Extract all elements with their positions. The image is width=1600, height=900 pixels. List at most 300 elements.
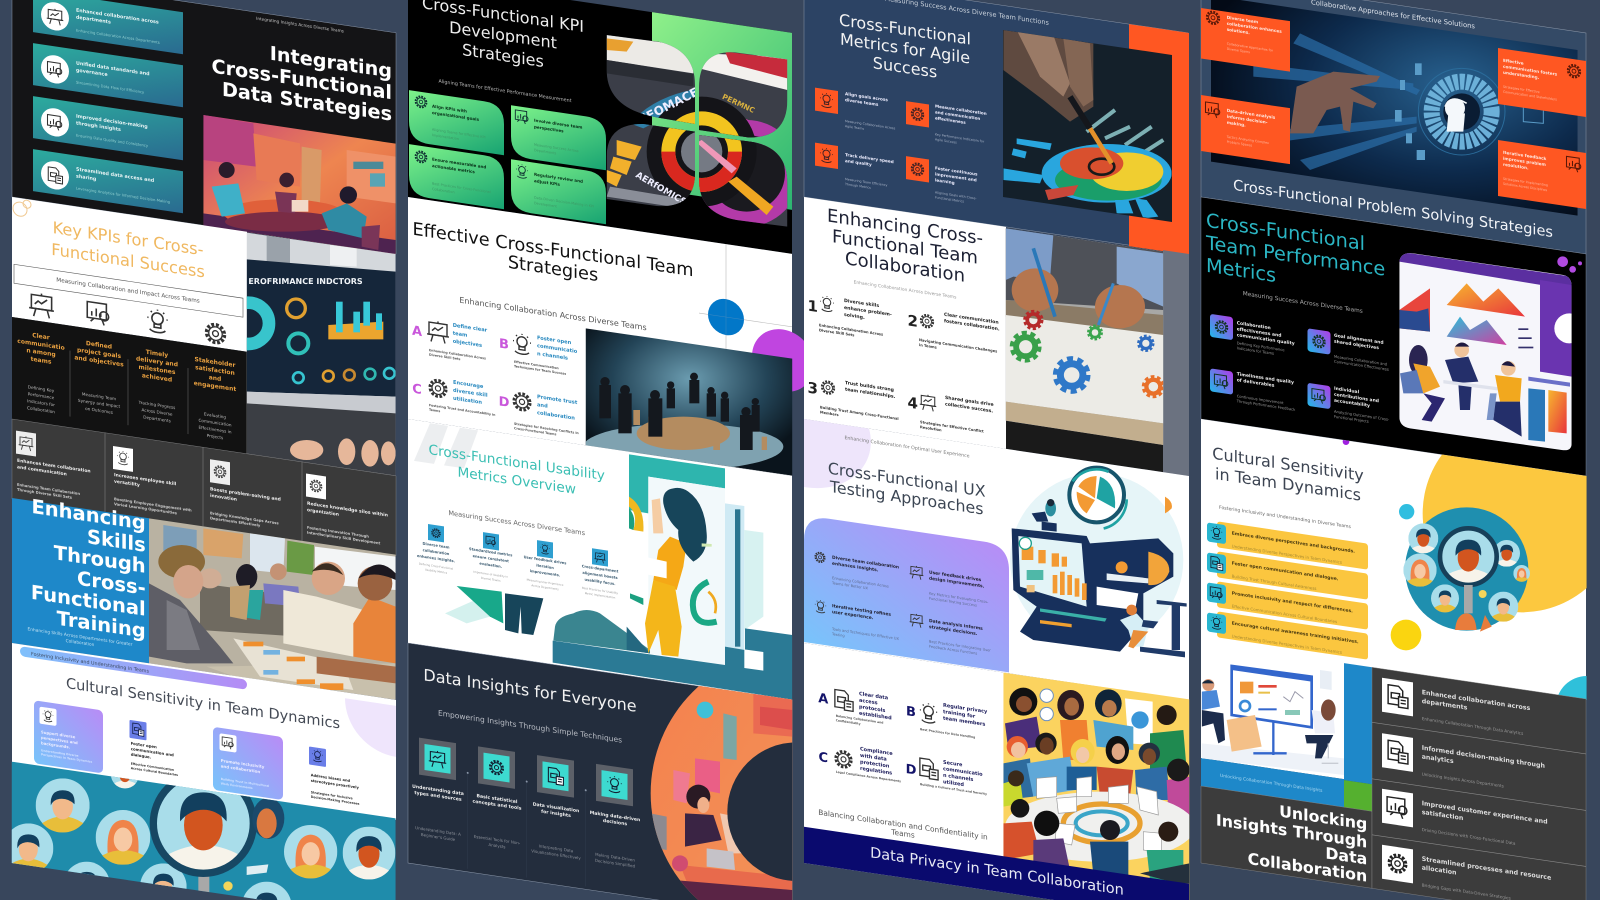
bar: embrace diverse: Understanding Diverse Perspectives in Team Dynamics [1232,544,1342,565]
title: Cross-Functional [839,10,971,49]
benefit: knowledge silos: Interdisciplinary Skill Development [307,531,380,546]
kpi columns [17,330,236,442]
privacy point B [906,697,988,741]
panel: Cross-Functional Metrics for Agile Success [804,0,1189,255]
item: user feedback: User feedback drives [929,570,982,583]
bar: embrace diverse [1207,520,1368,570]
kpi columns: Stakeholder [195,356,235,369]
row: customer experience: Improved customer experience and [1422,800,1548,826]
card: streamlined data access: Streamlined data access and [76,166,155,184]
card: review KPIs: adjust KPIs [534,178,561,187]
point 2: fosters collaboration. [944,318,1000,332]
privacy point C [819,740,901,783]
card: involve perspectives: Measuring Success Across [534,143,579,153]
card: team collaboration: solutions. [1227,27,1250,35]
row: streamlined processes: allocation [1422,864,1457,877]
metric: feedback: Across Departments [531,583,559,591]
benefit: problem solving: Boosts problem-solving and [210,486,281,503]
benefit: team collaboration: Through Diverse Skill Sets [17,488,73,500]
metric: team collaboration: Diverse team [423,542,450,550]
card: improved decision-making: through insights [76,120,121,133]
item: iterative testing: Testing [831,632,845,638]
bar: promote inclusivity: Effective Communication Across Cultural Boundaries [1232,604,1337,624]
privacy point C: protection [860,759,890,770]
card: align KPIs: Implementation [432,133,459,141]
metric: goal alignment: shared objectives [1334,339,1379,351]
bar: encourage awareness: Encourage cultural awareness training initiatives. [1232,621,1359,645]
strategy B: n channels [537,351,568,362]
point 4: 4 [907,393,918,413]
metric: alignment: Metric Implementation [585,591,616,600]
photo: workshop team [147,517,400,703]
card: effective communication [1498,48,1586,117]
step: decisions: Decisions Simplified [595,858,636,869]
kpi columns: Tracking Progress [138,400,175,410]
metric: standardized: evaluation. [479,562,502,569]
card: data driven: Tactics Analyzing Complex [1226,135,1269,145]
title: Collaboration [1248,849,1367,886]
card: data driven: informs decision- [1227,114,1268,125]
kpi columns: teams [31,356,52,366]
metric: collaboration: Collaboration [1237,320,1271,331]
point 3: 3 [807,379,818,398]
bar: encourage awareness [1207,610,1368,660]
caption: Balancing Collaboration and Confidentiality in [818,808,988,842]
strategy D: Strategies for Resolving Conflicts in [514,422,579,435]
card: review KPIs [511,159,606,224]
privacy point D: n channels [943,773,973,783]
metric: goal alignment: Measuring Collaboration and [1334,355,1387,367]
card: iterative feedback: Solutions Across Disciplines [1503,182,1547,192]
card: ensure metrics: actionable metrics [432,163,475,174]
panel: Cross-Functional Problem Solving Strategies [1201,0,1586,254]
image: four-petal performance dial: EFOMACE [637,85,701,127]
row: customer experience: Driving Decisions with Cross-Functional Data [1422,827,1516,846]
row: enhanced collaboration: Enhancing Collaboration Through Data Analytics [1422,716,1523,736]
point 2: Clear communication [944,312,999,326]
benefit: problem solving: Bridging Knowledge Gaps Across [210,511,279,526]
pill subtitle: Fostering Inclusivity and Understanding in Teams [31,651,149,675]
title: Insights Through [1216,810,1367,852]
card: align KPIs: Align KPIs with [432,104,467,114]
row: enhanced collaboration: departments [1422,698,1468,712]
card: enhanced collaboration [33,0,183,54]
metric: collaboration [1210,314,1295,359]
privacy point B: Best Practices for Data Handling [920,727,975,739]
privacy point D [906,754,987,796]
item: foster open communication: communication and [131,746,174,757]
title: Functional Team [832,226,978,269]
quote marks [414,421,478,470]
card: improved decision-making [33,96,183,160]
lavender corner [804,419,871,497]
title: Enhancing Cross- [827,205,983,249]
card: effective communication: Strategies for Effective [1503,85,1540,94]
icon: chart [87,302,109,326]
kpi columns: and [209,374,221,383]
bar: foster open: Foster open communication and dialogue. [1232,561,1339,582]
strategy D: Cross-Functional Teams [514,426,556,436]
photo: laptop dashboard [246,232,396,476]
title: Effective Cross-Functional Team [412,220,694,281]
item: user feedback: Key Metrics for Evaluating Cross- [929,592,989,604]
privacy point A: Confidentiality [836,718,861,726]
metric: alignment: usability focus. [585,578,615,586]
card: iterative feedback: Strategies for Implementing [1503,177,1548,187]
metric: timeliness [1210,367,1296,412]
title: Data Strategies [222,78,392,126]
metric: team collaboration: collaboration [423,548,450,556]
blue circle [708,296,744,338]
bar: promote inclusivity [1207,580,1368,630]
card: ensure metrics: Best Practices for Cross-Functional [432,182,491,194]
privacy point D: communicatio [943,766,983,778]
card: review KPIs: Development [534,201,557,209]
title: Functional [31,581,146,621]
card: effective communication: communication fosters [1503,64,1558,77]
metric: alignment: alignment boosts [582,571,618,580]
metric: collaboration: Defining Key Performance [1237,341,1285,352]
title: Metrics [1206,254,1276,287]
card: promote inclusivity: Building Trust in Multicultural [221,777,269,788]
illustration: team at round table [200,113,400,257]
bar: foster open [1207,550,1368,600]
item: team collaboration: Diverse team collaboration [832,555,899,571]
metric: timeliness: of deliverables [1237,377,1275,389]
kpi columns: Clear [32,332,50,342]
card: support diverse perspectives: Perspectives in Team Dynamics [41,752,92,764]
card: enhanced collaboration: Enhanced collaboration across [76,7,159,26]
privacy point A: A [818,691,828,708]
metric: individual contributions: Functional Projects [1334,415,1369,424]
card: improved decision-making: Ensuring Data Quality and Consistency [76,133,149,148]
strategy D: Promote trust [537,394,578,406]
item: iterative testing: Iterative testing refines [832,603,891,618]
kpi columns: achieved [142,372,172,384]
title band [804,827,1189,900]
card: effective communication: understanding. [1503,70,1540,80]
strategy B: B [499,336,509,353]
strategy A: team [453,331,467,339]
metric: feedback [524,538,566,592]
card: ensure metrics [409,144,504,209]
bar: encourage awareness: Understanding Diverse Perspectives in Team Dynamics [1232,634,1342,655]
metric: alignment [582,547,619,600]
privacy point C: Compliance [860,746,893,757]
card: unified data: governance [76,68,108,78]
strategy D: and [537,402,548,410]
title: Skills [87,525,146,557]
row: informed decisions [1382,733,1545,795]
strategy D: D [499,394,510,411]
title: Collaboration [845,248,965,287]
title: Training [57,607,146,643]
privacy point B: Regular privacy [943,703,988,715]
gradient panel [804,515,1009,672]
step: understanding data: types and sources [414,790,462,803]
benefit: knowledge silos [306,474,388,547]
item: measure collaboration: Key Performance Indicators for [935,132,985,144]
card: ensure metrics: Ensure measurable and [432,157,486,170]
decorative rings [13,198,31,218]
kpi columns: Synergy and Impact [78,398,120,409]
step: understanding data: Understanding data [412,784,464,797]
privacy point C: with data [860,753,887,763]
card: team collaboration: Diverse team [1227,15,1259,25]
point 1: enhance problem- [844,305,892,318]
illustration: presenting data on screen [1202,666,1344,775]
privacy point D: Secure [943,760,963,769]
panel: Enhancing Skills Through Cross-Functional Training [12,494,400,703]
item: user feedback: Functional Testing Success [929,597,977,608]
subtitle box [14,264,243,317]
item: track delivery: and quality [845,158,872,167]
card: unified data: Streamlining Data Flow for Efficiency [76,80,145,95]
metric: individual contributions [1308,382,1390,427]
step: visualization: for insights [541,809,571,819]
row: enhanced collaboration: Enhanced collaboration across [1422,689,1531,712]
row: customer experience [1382,789,1548,851]
card: iterative feedback: resolution. [1503,162,1529,171]
card: data driven: Problem Spaces [1227,140,1252,148]
item: align goals: Measuring Collaboration Across [845,119,896,131]
item: user feedback [910,565,989,609]
photo: laptop dashboard: EROFRIMANCE INDCTORS [248,277,363,286]
step: understanding data: Understanding Data: A [415,825,461,837]
card: data driven [1201,95,1290,164]
strategy C [412,374,496,422]
kpi columns: milestones [139,364,176,376]
card: enhanced collaboration: Enhancing Collaboration Across Departments [76,28,160,45]
row: customer experience: satisfaction [1422,809,1463,822]
strategy B: communicatio [537,343,578,355]
item: foster improvement: Functional Metrics [935,195,964,204]
point 1: Diverse Skill Sets [819,328,854,337]
title: Team Performance [1205,231,1385,281]
title: Cross-Functional Usability [429,442,605,484]
card: review KPIs: Regularly review and [534,172,583,184]
card: support diverse perspectives: backgrounds. [41,740,71,750]
benefit: team collaboration: and communication [17,464,67,478]
illustration: woman at data board [445,454,792,700]
card: promote inclusivity: and collaboration [221,763,260,774]
subtitle: Aligning Teams for Effective Performance Measurement [438,79,572,104]
benefit: team collaboration [16,431,91,503]
icon: bulb [147,308,168,334]
strategy C: utilization [453,396,482,406]
strategy A: objectives [453,339,482,349]
point 2 [907,306,1000,359]
point 4: Resolution [920,425,942,432]
card: iterative feedback: improves problem [1503,156,1546,167]
step: statistics [473,746,522,852]
subtitle: Integrating Insights Across Diverse Teams [256,16,344,34]
item: team collaboration: Enhancing Collaboration Across [832,576,889,589]
kpi columns: communicatio [17,338,65,352]
step: decisions: Making data-driven [590,810,640,823]
bar: embrace diverse: Embrace diverse perspectives and backgrounds. [1232,531,1355,555]
panel: grey benefits strip [12,419,396,556]
title: Cross-Functional [1206,209,1365,255]
card: team collaboration [1201,8,1290,72]
card: align KPIs: organizational goals [432,110,480,122]
subtitle: Collaboration [66,638,95,648]
decorative blobs and circular illustration [1342,440,1587,700]
title: Integrating [270,42,392,83]
item: iterative testing: user experience. [832,609,874,621]
subtitle: Measuring Success Across Diverse Teams [448,509,586,537]
image: four-petal performance dial: PERMNC [721,93,756,115]
item: team collaboration: Teams for Better UX [831,581,869,591]
metric: individual contributions: contributions and [1334,392,1379,404]
item: data analysis: Best Practices for Integrating User [929,640,991,653]
title: Data [1325,843,1367,869]
point 1: Enhancing Collaboration Across [819,323,883,337]
subtitle: Empowering Insights Through Simple Techniques [438,708,622,745]
step: visualization [531,754,581,861]
item: track delivery [815,143,894,193]
card: streamlined data access: sharing [76,173,97,183]
row: informed decisions: Unlocking Insights Across Departments [1422,771,1504,789]
title: Cross-Functional [212,55,392,104]
metric: standardized [469,530,512,584]
privacy point C: C [819,750,828,766]
privacy point D: Building a Culture of Trust and Security [920,782,987,796]
point 1: solving. [844,312,865,321]
item: address biases: Decision-Making Processes [311,795,360,806]
point 1 [807,293,892,343]
privacy point A: Balancing Collaboration and [836,714,883,725]
metric: timeliness: Continuous Improvement [1237,394,1284,405]
metric: standardized: Diverse Teams [481,576,501,583]
item: data analysis: Data analysis informs [929,618,983,632]
item: align goals [815,87,896,136]
card: data driven: Data-driven analysis [1227,108,1276,120]
row: informed decisions: analytics [1422,753,1454,765]
strategy B [499,329,578,378]
benefit: problem solving: Departments Effectively [210,516,261,528]
metric: goal alignment: Communication Effectiveness [1334,360,1389,372]
kpi columns: n among [26,347,56,358]
panel: Cross-Functional Usability Metrics Overview [408,419,792,700]
item: measure collaboration: and communication [935,109,980,121]
card: iterative feedback: Iterative feedback [1503,150,1547,161]
item: address biases: Address biases and [311,773,351,783]
item: measure collaboration: effectiveness [935,115,966,125]
card: team collaboration: Diverse Teams [1227,47,1250,54]
panel: Data Insights for Everyone [408,642,792,900]
metric: team collaboration: enhances insights. [417,554,455,563]
bar: foster open: Building Trust Through Cultural Awareness [1232,574,1317,591]
item: align goals: diverse teams [845,97,879,107]
card: streamlined data access [33,149,183,213]
item: foster open communication: Across Cultural Boundaries [131,766,178,777]
privacy point A: access [859,698,878,706]
item: foster open communication: Foster open [131,741,157,749]
strategy C: Teams [429,408,440,413]
kpi columns: Defining Key [28,384,55,393]
title: Cross-Functional UX [828,459,986,501]
strategy B: Techniques for Team Success [514,364,566,376]
title: Through [54,541,146,578]
item: align goals: Align goals across [845,91,888,102]
item: address biases: stereotypes proactively [311,779,359,790]
card: effective communication: Effective [1503,58,1524,66]
item: measure collaboration: Measure collaboration [935,103,987,116]
photo: hand pointing at target chart [1003,30,1172,218]
card: promote inclusivity: Promote inclusivity [221,758,265,769]
step: understanding data: Beginner's Guide [421,832,456,842]
card: promote inclusivity [213,727,283,800]
card: involve perspectives: perspectives [534,124,564,134]
step: visualization: Data visualization [533,801,579,814]
item: foster improvement: learning [935,177,955,185]
item: track delivery: Track delivery speed [845,152,894,164]
subtitle box: Measuring Collaboration and Impact Across Teams [56,277,200,305]
kpi columns: Projects [207,433,223,440]
strategy A [412,317,488,365]
item: track delivery: Measuring Team Efficiency [845,177,888,187]
panel: Cross-Functional KPI Development Strategies [408,0,800,254]
card: enhanced collaboration: departments [76,14,111,26]
step: decisions: Making Data-Driven [595,852,635,863]
metric: standardized: Standardized metrics [469,547,512,557]
kpi columns: Collaboration [27,405,55,414]
step: statistics: Essential Tools for Non- [474,834,521,846]
item: iterative testing: Tools and Techniques for Effective UX [831,627,900,641]
benefit: skill versatility: Boosting Employee Engagement with [114,497,192,513]
icon: board [29,292,54,319]
subtitle: Fostering Inclusivity and Understanding in Diverse Teams [1219,505,1352,530]
strategy A: Diverse Skill Sets [429,353,461,361]
strategy C: diverse skill [453,388,488,399]
pill subtitle [20,646,247,690]
item: foster open communication: dialogue. [131,752,152,760]
card: support diverse perspectives: perspectives and [41,735,78,745]
point 3: Members [820,410,839,417]
title: Strategies [462,40,544,71]
metric: individual contributions: accountability [1334,398,1370,409]
benefit: team collaboration: Enhances team collaboration [17,458,91,475]
kpi columns: on Outcomes [85,406,113,415]
card: align KPIs: Aligning Teams for Effective KPI [432,128,486,139]
photo: team with chess pieces [583,327,797,477]
metric: feedback: improvements. [530,569,560,578]
card: team collaboration: collaboration enhances [1227,21,1282,34]
benefit: skill versatility: Increases employee skill [114,472,177,487]
photo: hand touching digital interface [1210,0,1580,220]
step: decisions [590,763,640,869]
kpi columns: delivery and [136,355,178,369]
item: team collaboration: enhances insights. [832,561,879,574]
card: promote inclusivity: Work Environments [221,781,253,790]
metric: alignment: Cross-department [582,564,619,574]
point 2: 2 [907,311,918,331]
item: iterative testing [815,599,900,646]
panel: Cross-Functional UX Testing Approaches [804,419,1189,700]
strategy C: C [412,382,422,398]
benefit: skill versatility: versatility [114,479,140,488]
kpi columns: Evaluating [204,411,226,420]
metric: feedback: Measuring User Experience [527,578,564,587]
privacy point A [818,685,892,731]
benefit: knowledge silos: Reduces knowledge silos within [307,501,388,519]
item: team collaboration [815,552,899,595]
point 4 [907,389,994,440]
illustration: UX dashboard machine [1010,468,1187,657]
panel: Enhancing Cross-Functional Team Collaboration [804,197,1189,476]
metric: team collaboration [417,522,455,576]
